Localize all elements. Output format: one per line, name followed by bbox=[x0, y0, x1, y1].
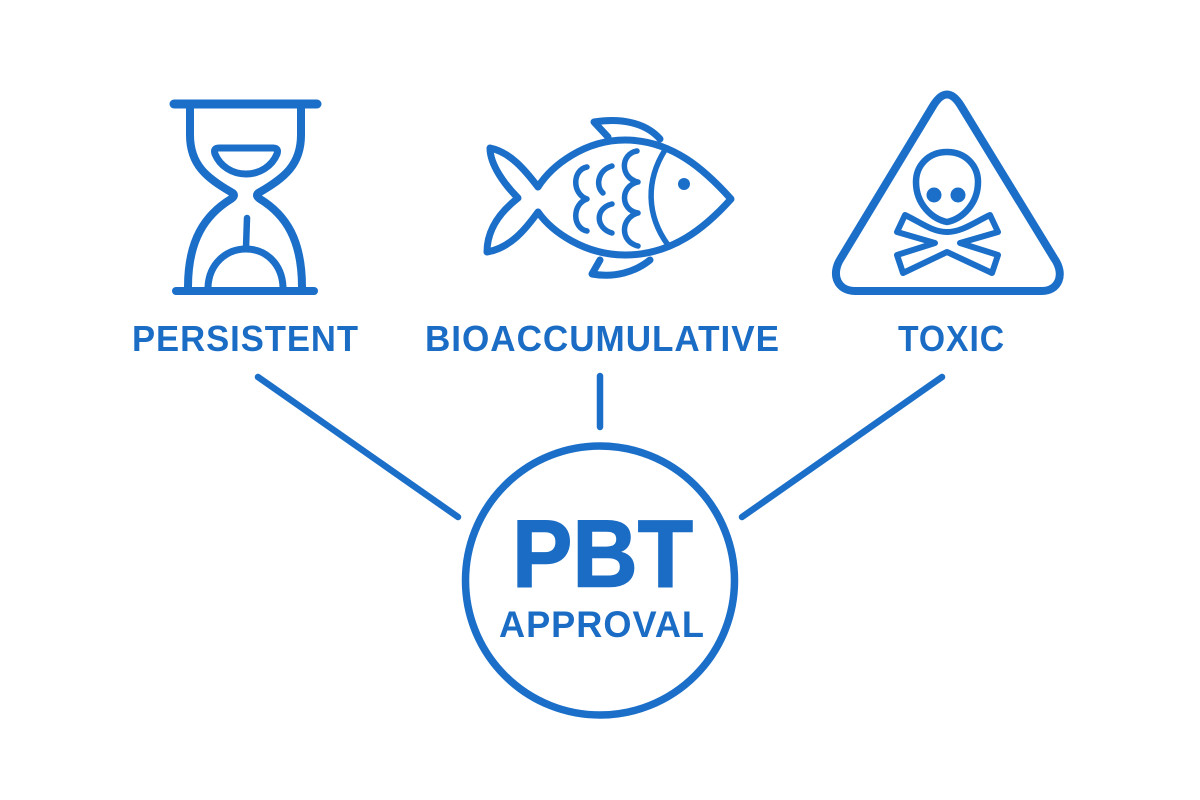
subheading: approval: APPROVAL bbox=[499, 604, 705, 645]
label: toxic: TOXIC bbox=[898, 318, 1005, 359]
skull bbox=[916, 152, 978, 222]
connector: bioaccumulative to PBT bbox=[597, 376, 603, 427]
label: persistent: PERSISTENT bbox=[132, 318, 359, 359]
crossbones bbox=[897, 215, 998, 273]
skull eyes bbox=[926, 188, 966, 202]
icon: toxic warning triangle bbox=[836, 94, 1060, 291]
PBT approval circle bbox=[466, 446, 734, 715]
icon: hourglass bbox=[174, 104, 317, 291]
connector: toxic to PBT bbox=[742, 377, 942, 517]
connector: persistent to PBT bbox=[258, 377, 458, 517]
heading: PBT: PBT bbox=[512, 500, 693, 608]
label: bioaccumulative: BIOACCUMULATIVE bbox=[425, 318, 780, 359]
icon: fish bbox=[487, 121, 731, 275]
